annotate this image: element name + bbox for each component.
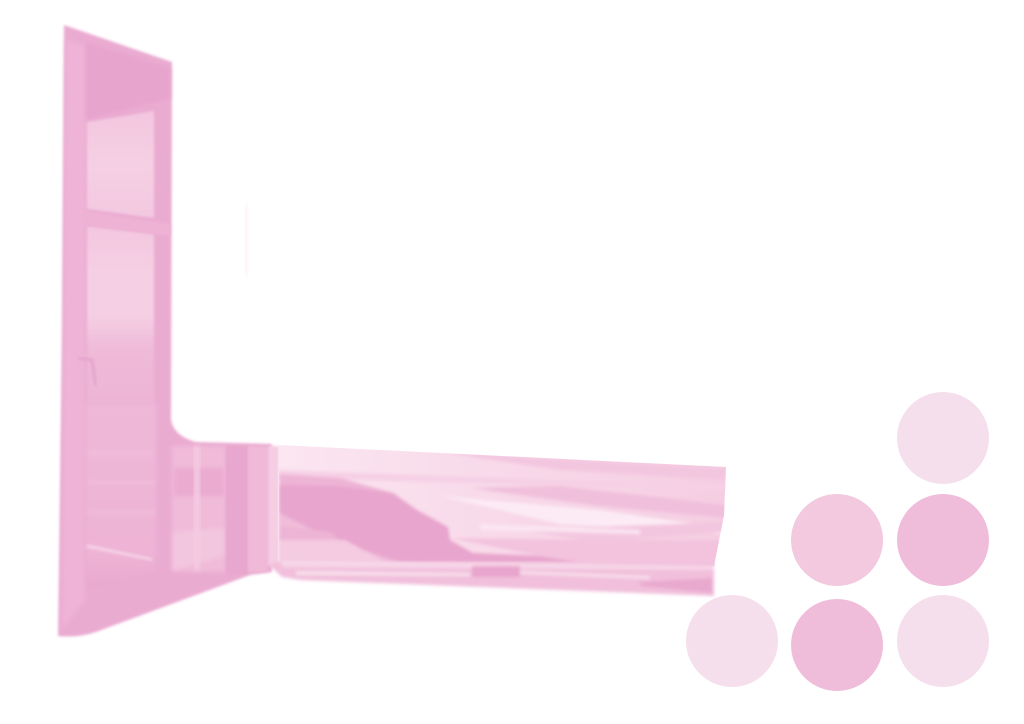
lower panel stripes (87, 450, 155, 515)
side glass reflection (174, 468, 224, 496)
door top rail (86, 42, 170, 120)
side glass section (172, 446, 226, 572)
wave bands (470, 486, 726, 518)
upper glass pane (87, 111, 154, 218)
headland ridge (279, 474, 393, 493)
lower glass pane (87, 226, 154, 404)
circle: middle right (897, 494, 989, 586)
circle: bottom left (686, 595, 778, 687)
window frame and open door (58, 25, 279, 636)
circle: bottom right (897, 595, 989, 687)
door handle (78, 358, 96, 386)
dark mullion (226, 446, 248, 574)
mullion light (248, 446, 268, 572)
sky and sea (279, 440, 729, 570)
circle: top right (897, 392, 989, 484)
sea view (279, 440, 729, 570)
door frame body (58, 25, 272, 636)
lower panel glint (87, 544, 152, 561)
frame edge light (268, 446, 279, 566)
foreground grass (279, 513, 400, 563)
door outer stile highlight (62, 40, 86, 630)
mid rail (84, 211, 170, 236)
lower door panel (86, 404, 156, 590)
circle group (686, 392, 989, 691)
headland (279, 485, 582, 563)
faint smudge (245, 205, 248, 275)
sky bands (458, 454, 726, 476)
window sill (268, 561, 714, 596)
circle: bottom middle (791, 599, 883, 691)
circle: middle left (791, 494, 883, 586)
